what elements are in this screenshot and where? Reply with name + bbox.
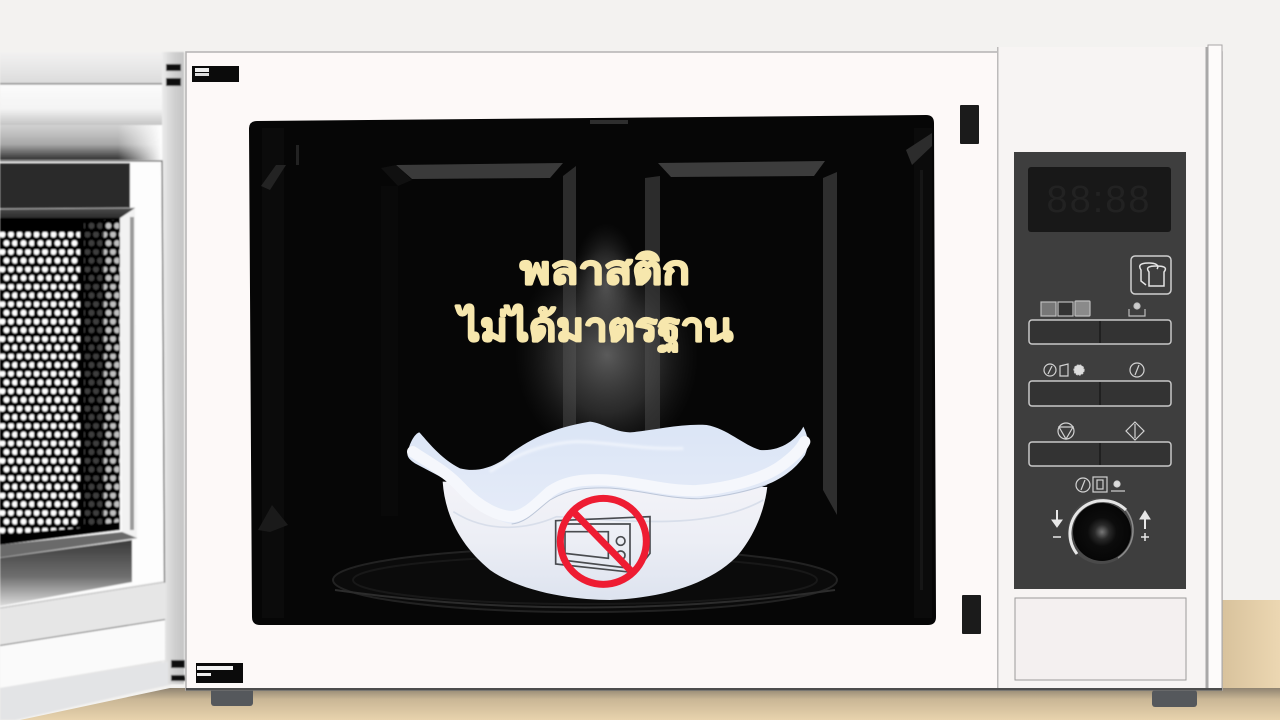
digital display: 88:88 <box>1046 179 1152 221</box>
door latch slots <box>960 105 981 634</box>
microwave feet <box>211 686 1197 707</box>
bowl rim white band <box>413 442 805 517</box>
digital display <box>1028 167 1171 232</box>
arrow down minus <box>1052 510 1062 537</box>
icon row 2 <box>1044 363 1144 377</box>
arrow up plus <box>1140 511 1150 541</box>
door latch bottom <box>171 660 185 681</box>
door latch top <box>166 64 181 86</box>
button row 3 <box>1029 442 1171 466</box>
turntable <box>333 548 837 612</box>
cavity right wall panel <box>906 128 932 618</box>
door lower dark band <box>0 540 132 606</box>
door hinge side strip <box>162 52 184 684</box>
door inner frame <box>0 125 162 160</box>
bowl <box>407 422 808 600</box>
mesh window <box>0 218 120 545</box>
mesh frame <box>0 208 137 558</box>
bowl rim <box>407 422 808 524</box>
heading: unsafe plastic <box>455 249 733 354</box>
icon row 4 <box>1076 477 1125 492</box>
dial <box>1068 498 1134 564</box>
no microwave icon <box>556 498 650 584</box>
bottom hinge <box>196 663 243 683</box>
icon row 3 <box>1058 422 1144 440</box>
button row 2 <box>1029 381 1171 406</box>
heading: unsafe plastic: พลาสติก <box>520 249 690 293</box>
open door <box>0 52 186 720</box>
lower blank plate <box>1015 598 1186 680</box>
heading: unsafe plastic: ไม่ได้มาตรฐาน <box>455 304 733 354</box>
countertop <box>20 600 1280 720</box>
black band <box>0 163 130 208</box>
door lower bands <box>0 583 165 645</box>
door second band <box>0 85 162 125</box>
cavity top vent <box>590 120 628 124</box>
bowl body <box>443 482 767 600</box>
steam <box>515 223 699 460</box>
button row 1 <box>1029 320 1171 344</box>
door top band <box>0 52 165 83</box>
icon: bread <box>1131 256 1171 294</box>
oven cavity <box>249 115 936 625</box>
cavity left wall panel <box>258 128 299 618</box>
bowl inner highlight <box>490 442 683 472</box>
top hinge <box>192 66 239 82</box>
icon row 1 <box>1041 301 1145 316</box>
side strip <box>1208 45 1222 690</box>
control panel <box>1014 152 1186 589</box>
microwave front body <box>186 45 1222 690</box>
control panel column <box>997 47 1208 690</box>
back wall left raised panel <box>381 163 576 516</box>
back wall right raised panel <box>645 161 837 515</box>
